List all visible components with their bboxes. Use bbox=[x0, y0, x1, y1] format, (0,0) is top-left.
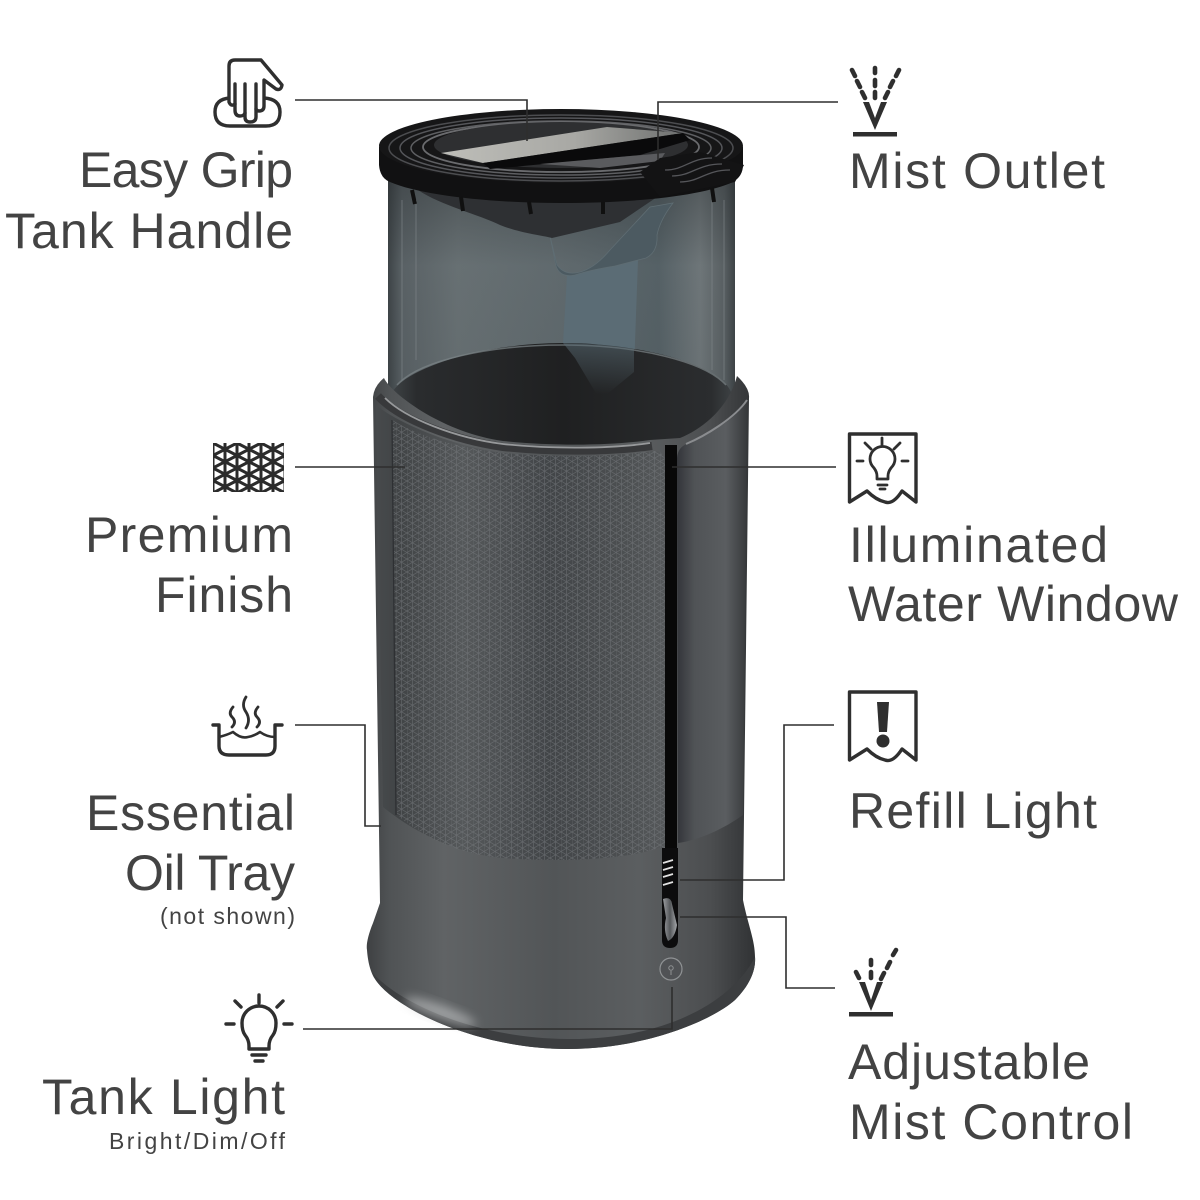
leader: refill light bbox=[680, 725, 834, 880]
tank body bbox=[388, 176, 735, 400]
label: tank light: Bright/Dim/Off bbox=[109, 1128, 286, 1154]
label: illuminated water window: Illuminated bbox=[849, 517, 1108, 573]
leader: tank handle bbox=[295, 100, 527, 141]
label: mist outlet: Mist Outlet bbox=[849, 143, 1105, 199]
icon: essential oil tray bbox=[213, 697, 282, 755]
icon: hand grip bbox=[215, 60, 282, 126]
label: adjustable mist control: Mist Control bbox=[849, 1094, 1133, 1150]
grip handle bbox=[441, 127, 683, 163]
base body bbox=[367, 376, 755, 1049]
icon: illuminated water window bbox=[850, 434, 916, 503]
label: tank light bbox=[42, 1069, 286, 1154]
lip bbox=[378, 396, 652, 451]
label: essential oil tray: Oil Tray bbox=[125, 845, 295, 901]
skirt shadow bbox=[372, 957, 755, 1049]
label: premium finish: Finish bbox=[155, 567, 293, 623]
light button bbox=[660, 958, 682, 980]
label: easy grip tank handle: Easy Grip bbox=[79, 142, 293, 198]
icon: refill light bbox=[850, 692, 916, 761]
label: refill light: Refill Light bbox=[849, 783, 1097, 839]
label: easy grip tank handle bbox=[5, 142, 293, 259]
leader: mist control bbox=[680, 917, 835, 988]
label: easy grip tank handle: Tank Handle bbox=[5, 203, 293, 259]
leader: water window bbox=[672, 466, 836, 468]
icon: tank light bulb bbox=[226, 995, 292, 1061]
control slot bbox=[662, 445, 678, 948]
label: tank light: Tank Light bbox=[42, 1069, 285, 1125]
leader: oil tray bbox=[295, 725, 381, 826]
label: adjustable mist control bbox=[848, 1034, 1133, 1150]
lid bbox=[379, 109, 744, 214]
skirt highlight bbox=[402, 992, 478, 1032]
label: adjustable mist control: Adjustable bbox=[848, 1034, 1090, 1090]
label: illuminated water window: Water Window bbox=[848, 576, 1179, 632]
leader: premium finish bbox=[295, 466, 405, 468]
icon: adjustable mist control bbox=[849, 950, 896, 1016]
column reflection bbox=[563, 343, 634, 400]
label: essential oil tray: (not shown) bbox=[160, 903, 295, 929]
label: essential oil tray: Essential bbox=[86, 785, 295, 841]
icon: mist outlet bbox=[852, 68, 899, 136]
right panel bbox=[677, 402, 747, 843]
label: premium finish bbox=[85, 507, 293, 623]
icon: premium finish texture bbox=[213, 443, 284, 492]
product: humidifier bbox=[367, 109, 755, 1049]
label: illuminated water window bbox=[848, 517, 1179, 632]
mist outlet bbox=[540, 153, 665, 168]
leader: mist outlet bbox=[658, 102, 838, 160]
label: premium finish: Premium bbox=[85, 507, 293, 563]
label: essential oil tray bbox=[86, 785, 295, 929]
dark water surface bbox=[380, 343, 748, 475]
leader: tank light bbox=[303, 987, 672, 1029]
funnel nozzle bbox=[550, 203, 673, 276]
textured front panel bbox=[376, 405, 665, 860]
funnel bbox=[418, 190, 660, 238]
water column bbox=[563, 260, 638, 400]
mist knob bbox=[663, 898, 677, 941]
lip highlight bbox=[385, 398, 650, 448]
